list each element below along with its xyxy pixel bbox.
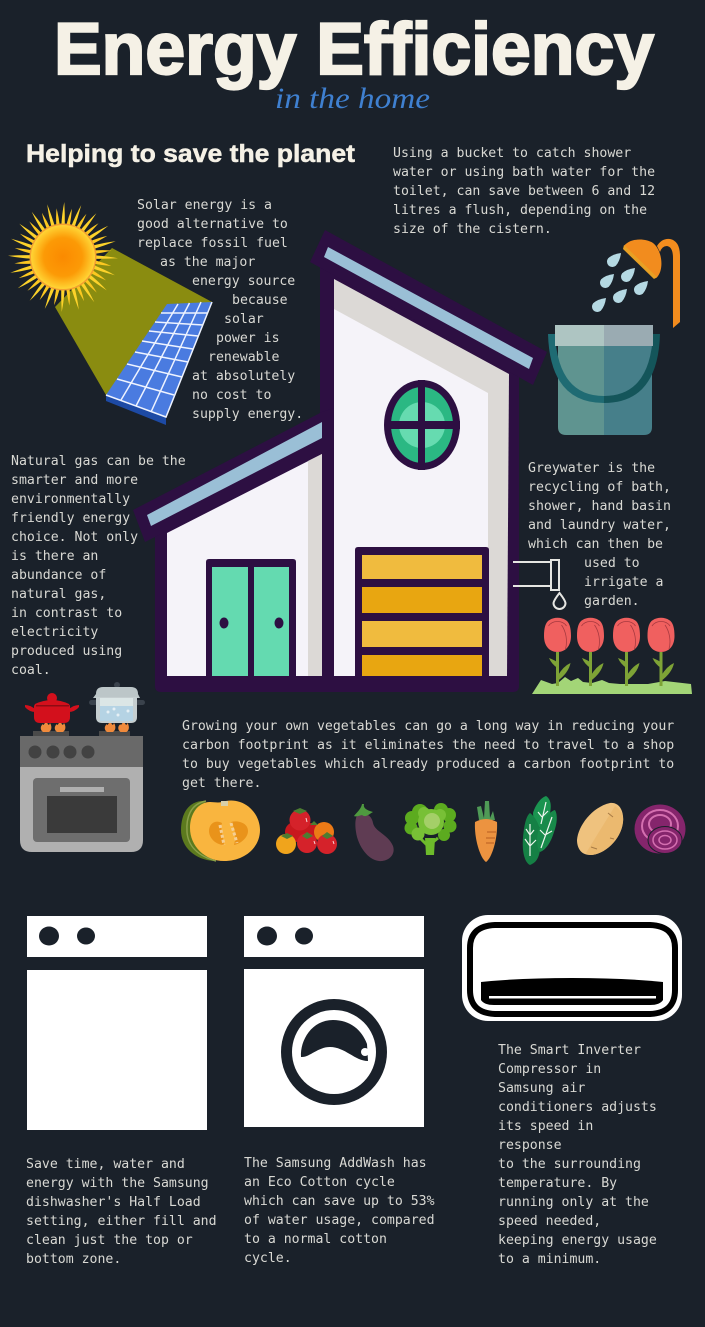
text: vegetables: get there.: [182, 776, 261, 791]
icon: roses: [532, 618, 692, 694]
text: greywater: garden.: [584, 594, 640, 609]
icon: sun: [8, 202, 118, 312]
text: greywater: used to: [584, 556, 640, 571]
icon: pumpkin: [181, 800, 260, 861]
text: washing machine: The Samsung AddWash has: [244, 1156, 427, 1171]
icon: washing machine: [244, 916, 424, 1127]
text: vegetables: to buy vegetables which already produced a carbon footprint to: [182, 757, 674, 772]
text: dishwasher: clean just the top or: [26, 1233, 193, 1248]
icon: carrot: [475, 801, 497, 862]
left wall: [167, 454, 322, 676]
icon: aubergine: [354, 804, 394, 861]
text: air conditioner: response: [498, 1138, 562, 1153]
text: vegetables: [182, 719, 674, 791]
icon: solar panel: [106, 302, 212, 425]
text: natural gas: environmentally: [11, 492, 130, 507]
text: washing machine: to a normal cotton: [244, 1232, 387, 1247]
text: greywater: recycling of bath,: [528, 480, 671, 495]
icon: bucket: [548, 325, 660, 435]
text: washing machine: which can save up to 53%: [244, 1194, 435, 1209]
text: greywater: Greywater is the: [528, 461, 655, 476]
text: natural gas: smarter and more: [11, 473, 138, 488]
text: natural gas: is there an: [11, 549, 98, 564]
text: air conditioner: Samsung air: [498, 1081, 585, 1096]
left wall shade: [308, 454, 322, 676]
text: solar energy: renewable: [208, 350, 280, 365]
right roof glass: [324, 247, 533, 369]
text: air conditioner: Compressor in: [498, 1062, 601, 1077]
text: solar energy: no cost to: [192, 388, 271, 403]
text: greywater: shower, hand basin: [528, 499, 671, 514]
text: solar energy: because: [232, 293, 288, 308]
text: air conditioner: [498, 1043, 657, 1267]
icon: beetroot: [634, 804, 686, 854]
text: dishwasher: [26, 1157, 217, 1267]
text: solar energy: solar: [224, 312, 264, 327]
text: solar energy: Solar energy is a: [137, 198, 272, 213]
right wall: [334, 309, 488, 676]
text: bucket tip: water or using bath water for the: [393, 165, 655, 180]
right wall shade: [334, 279, 509, 676]
door: [206, 559, 296, 676]
text: dishwasher: Save time, water and: [26, 1157, 185, 1172]
right roof: [310, 230, 547, 385]
text: greywater: and laundry water,: [528, 518, 671, 533]
text: natural gas: [11, 454, 186, 678]
text: solar energy: as the major: [160, 255, 255, 270]
text: natural gas: natural gas,: [11, 587, 106, 602]
icon: stove: [20, 721, 143, 852]
text: dishwasher: energy with the Samsung: [26, 1176, 209, 1191]
heading: Helping to save the planet: [26, 140, 356, 168]
text: vegetables: Growing your own vegetables can go a long way in reducing your: [182, 719, 674, 734]
subtitle: in the home: [275, 82, 430, 115]
icon: red pot: [25, 693, 79, 723]
text: natural gas: produced using: [11, 644, 122, 659]
text: solar energy: energy source: [192, 274, 295, 289]
icon: broccoli: [404, 803, 456, 855]
round window: [384, 380, 460, 470]
text: natural gas: choice. Not only: [11, 530, 138, 545]
text: air conditioner: to a minimum.: [498, 1252, 601, 1267]
text: air conditioner: speed needed,: [498, 1214, 601, 1229]
text: greywater: [528, 461, 671, 609]
text: bucket tip: toilet, can save between 6 and 12: [393, 184, 655, 199]
text: vegetables: carbon footprint as it eliminates the need to travel to a shop: [182, 738, 674, 753]
text: bucket tip: Using a bucket to catch shower: [393, 146, 631, 161]
text: air conditioner: to the surrounding: [498, 1157, 641, 1172]
text: air conditioner: The Smart Inverter: [498, 1043, 641, 1058]
title: Energy Efficiency: [54, 9, 654, 90]
garage door: [355, 547, 489, 676]
text: air conditioner: temperature. By: [498, 1176, 617, 1191]
text: solar energy: supply energy.: [192, 407, 303, 422]
text: bucket tip: size of the cistern.: [393, 222, 552, 237]
illustration: house: [133, 230, 547, 692]
text: solar energy: power is: [216, 331, 280, 346]
icon: tomatoes: [276, 808, 337, 854]
icon: water drops: [592, 253, 648, 312]
text: washing machine: of water usage, compared: [244, 1213, 435, 1228]
text: bucket tip: litres a flush, depending on the: [393, 203, 647, 218]
left roof: [133, 408, 334, 542]
text: air conditioner: keeping energy usage: [498, 1233, 657, 1248]
text: bucket tip: [393, 146, 655, 237]
text: natural gas: friendly energy: [11, 511, 130, 526]
text: natural gas: electricity: [11, 625, 98, 640]
text: air conditioner: conditioners adjusts: [498, 1100, 657, 1115]
text: natural gas: abundance of: [11, 568, 106, 583]
text: greywater: which can then be: [528, 537, 663, 552]
left roof glass: [147, 422, 322, 526]
icon: air conditioner: [462, 915, 682, 1021]
text: solar energy: [137, 198, 303, 422]
icon: silver pot: [89, 682, 145, 723]
text: washing machine: [244, 1156, 435, 1266]
text: dishwasher: bottom zone.: [26, 1252, 121, 1267]
icon: solar beam: [55, 248, 212, 395]
text: air conditioner: running only at the: [498, 1195, 649, 1210]
house body outline: [155, 262, 519, 692]
text: air conditioner: its speed in: [498, 1119, 593, 1134]
icon: shower head: [623, 239, 680, 328]
text: dishwasher: dishwasher's Half Load: [26, 1195, 201, 1210]
text: natural gas: Natural gas can be the: [11, 454, 186, 469]
text: washing machine: an Eco Cotton cycle: [244, 1175, 395, 1190]
icon: potato: [577, 803, 623, 855]
text: solar energy: at absolutely: [192, 369, 295, 384]
text: natural gas: coal.: [11, 663, 51, 678]
icon: leafy greens: [523, 796, 557, 865]
icon: dishwasher: [27, 916, 207, 1130]
icon: tap with drop: [513, 560, 566, 609]
text: solar energy: good alternative to: [137, 217, 288, 232]
text: natural gas: in contrast to: [11, 606, 122, 621]
text: solar energy: replace fossil fuel: [137, 236, 288, 251]
text: dishwasher: setting, either fill and: [26, 1214, 217, 1229]
text: washing machine: cycle.: [244, 1251, 292, 1266]
text: greywater: irrigate a: [584, 575, 663, 590]
